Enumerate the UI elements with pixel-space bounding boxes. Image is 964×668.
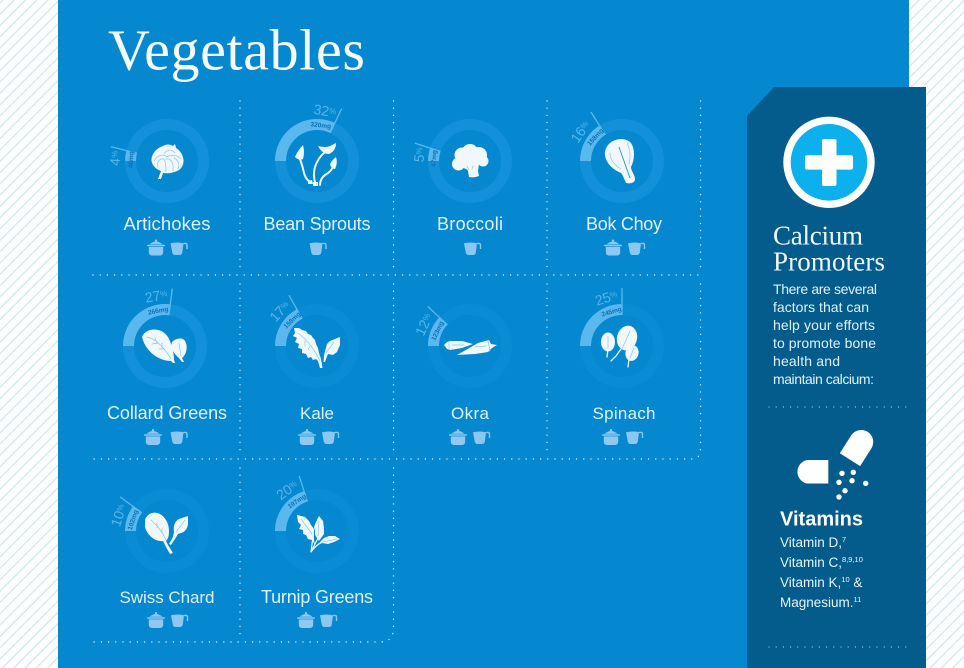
servings: pot and cup <box>147 612 188 628</box>
servings: pot and cup <box>604 240 644 256</box>
sidebar intro text: There are several <box>773 281 877 297</box>
donut: spinach 25%: % <box>609 289 618 300</box>
donut: okra 12%: 123mg <box>430 320 446 342</box>
donut: turnip greens 20%: 20 <box>273 481 295 503</box>
sidebar heading <box>773 221 885 277</box>
vitamins list: Vitamin D, <box>780 535 842 550</box>
vitamins list: 8,9,10 <box>842 555 863 564</box>
sidebar intro text: to promote bone <box>773 335 876 351</box>
icon: spinach leaves <box>601 323 640 367</box>
donut: broccoli 5% <box>411 124 506 198</box>
donut: kale 17%: % <box>279 300 290 311</box>
donut: artichokes 4%: 40mg <box>128 151 135 168</box>
servings: pot and cup <box>147 240 187 256</box>
donut: bok choy 16%: 16 <box>567 124 589 146</box>
donut: turnip greens 20%: % <box>288 479 299 490</box>
icon: artichoke <box>151 144 184 179</box>
vitamins list: 10 <box>841 575 850 584</box>
servings: pot and cup <box>298 429 338 445</box>
vitamins list: & <box>850 575 862 590</box>
icon: vitamin capsule <box>797 425 878 500</box>
label: Spinach <box>592 404 656 423</box>
donut: broccoli 5%: 47mg <box>431 150 439 167</box>
cell: Spinach <box>580 286 658 445</box>
donut: swiss chard 10%: % <box>115 503 126 512</box>
sidebar heading: Promoters <box>773 247 885 277</box>
donut: artichokes 4% <box>107 124 204 198</box>
icon: collard leaves <box>142 329 187 363</box>
donut: kale 17%: 17 <box>266 303 288 325</box>
icon: okra <box>444 340 497 355</box>
servings: pot and cup <box>144 429 187 445</box>
donut: swiss chard 10%: 102mg <box>127 509 140 531</box>
donut: bok choy 16%: % <box>579 120 590 131</box>
icon: swiss chard <box>145 513 188 554</box>
donut: bean sprouts 32%: 320mg <box>310 121 331 130</box>
donut: collard greens 27%: 27 <box>144 287 162 306</box>
icon: turnip greens <box>297 515 340 552</box>
icon: kale <box>293 328 340 368</box>
label: Bean Sprouts <box>264 214 370 234</box>
donut: broccoli 5%: 5 <box>411 153 427 163</box>
servings: cup <box>464 242 480 255</box>
cell: Swiss Chard <box>107 494 214 628</box>
sidebar heading: Calcium <box>773 221 863 251</box>
donut: okra 12% <box>412 306 506 382</box>
servings: pot and cup <box>602 429 642 445</box>
vitamins list: 7 <box>842 535 846 544</box>
donut: spinach 25%: 25 <box>593 289 613 309</box>
vitamins list: Magnesium. <box>780 595 854 610</box>
cell: Bok Choy <box>567 112 662 256</box>
label: Bok Choy <box>586 214 662 234</box>
donut: artichokes 4%: % <box>110 151 119 158</box>
sidebar intro text: factors that can <box>773 299 869 315</box>
label: Kale <box>300 404 334 423</box>
cell: Artichokes <box>107 124 210 256</box>
donut: bean sprouts 32%: % <box>329 106 337 116</box>
servings: cup <box>310 242 326 255</box>
label: Turnip Greens <box>261 587 373 607</box>
cell: Kale <box>266 295 354 445</box>
label: Broccoli <box>437 214 503 234</box>
cell: Bean Sprouts <box>264 101 370 255</box>
sidebar intro text: maintain calcium: <box>773 371 874 387</box>
servings: pot and cup <box>297 612 336 628</box>
donut: okra 12%: % <box>421 312 432 322</box>
icon: broccoli <box>452 144 488 177</box>
donut: collard greens 27% <box>123 286 202 382</box>
donut: bok choy 16%: 158mg <box>586 127 605 147</box>
label: Okra <box>451 404 490 423</box>
sidebar intro text: help your efforts <box>773 317 875 333</box>
donut: bean sprouts 32% <box>275 101 354 198</box>
servings: pot and cup <box>449 429 490 445</box>
donut: swiss chard 10%: 10 <box>107 509 127 529</box>
cell: Broccoli <box>411 124 506 255</box>
icon: bean sprouts <box>295 143 337 186</box>
donut: collard greens 27%: % <box>159 289 168 299</box>
label: Artichokes <box>124 213 210 234</box>
donut: okra 12%: 12 <box>412 317 433 338</box>
dotted grid dividers <box>93 101 700 642</box>
sidebar intro text <box>773 281 877 387</box>
donut: bean sprouts 32%: 32 <box>313 101 330 119</box>
donut: spinach 25% <box>580 286 658 382</box>
donut: kale 17% <box>266 295 354 382</box>
donut: swiss chard 10% <box>107 494 204 568</box>
donut: spinach 25%: 245mg <box>601 306 623 319</box>
cell: Okra <box>412 306 506 445</box>
donut: kale 17%: 158mg <box>283 311 302 330</box>
vitamins list: Vitamin K, <box>780 575 841 590</box>
cell: Turnip Greens <box>261 476 373 628</box>
donut: turnip greens 20%: 197mg <box>287 493 308 510</box>
sidebar intro text: health and <box>773 353 840 369</box>
title: Vegetables <box>108 18 365 82</box>
donut: broccoli 5%: % <box>414 147 424 155</box>
icon: bok choy <box>605 139 635 183</box>
donut: collard greens 27%: 266mg <box>147 306 169 317</box>
vitamins list: Vitamin C, <box>780 555 842 570</box>
cell: Collard Greens <box>107 286 227 445</box>
label: Swiss Chard <box>120 588 214 607</box>
vitamins list: 11 <box>854 595 861 604</box>
vitamins heading: Vitamins <box>780 509 863 531</box>
donut: turnip greens 20% <box>273 476 354 568</box>
icon: plus circle <box>783 117 875 208</box>
donut: artichokes 4%: 4 <box>107 158 123 166</box>
panel: calcium promoters sidebar <box>747 87 926 668</box>
donut: bok choy 16% <box>567 112 658 198</box>
label: Collard Greens <box>107 403 227 423</box>
vitamins list <box>780 535 863 610</box>
